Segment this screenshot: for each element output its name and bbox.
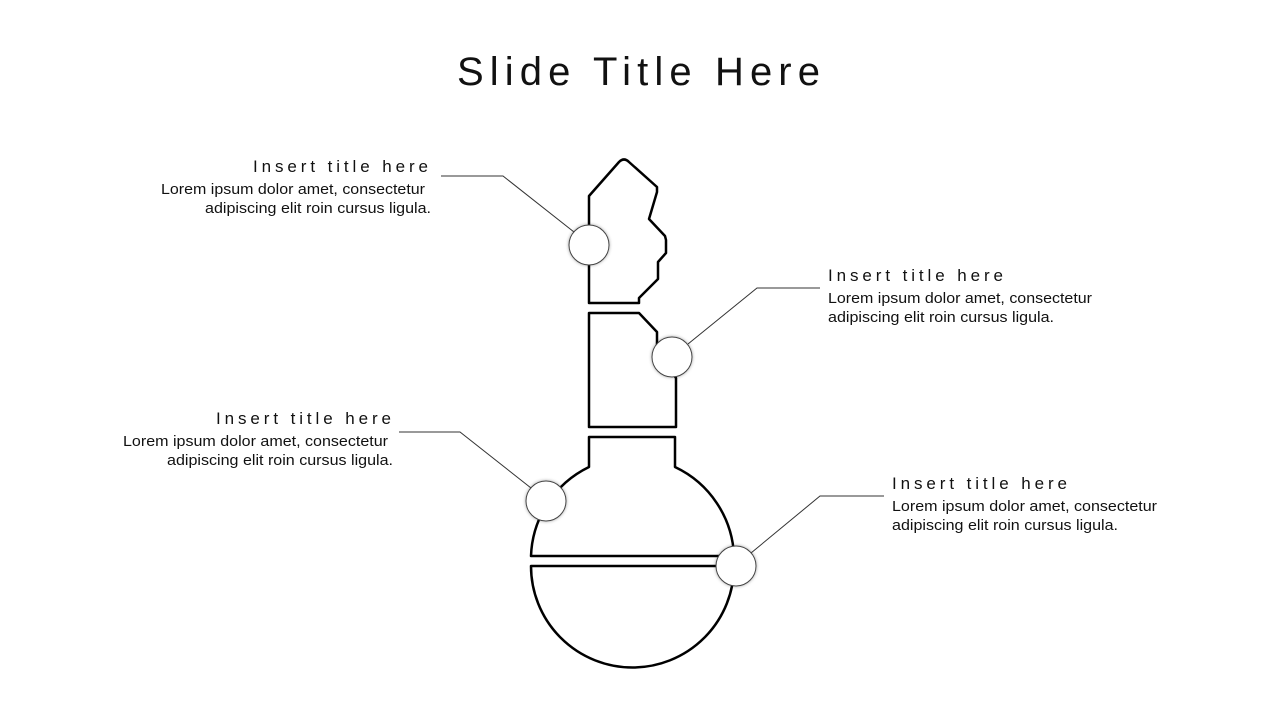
callout: right 1: Lorem ipsum dolor amet, consectetur — [828, 290, 1092, 307]
shape: middle piece — [589, 313, 676, 427]
callout: right 1: adipiscing elit roin cursus ligula. — [828, 309, 1054, 326]
shape: flask lower — [531, 566, 734, 668]
callout: left 2: adipiscing elit roin cursus ligula. — [167, 452, 393, 469]
callout: left 2: Insert title here — [216, 409, 391, 428]
callout: left 2: Lorem ipsum dolor amet, consectetur — [123, 433, 388, 450]
markers — [526, 225, 756, 586]
callout: right 1: Insert title here — [828, 266, 1003, 285]
connector lines — [399, 176, 884, 553]
callout: right 2 — [892, 474, 1157, 534]
callout: right 2: Insert title here — [892, 474, 1067, 493]
callout: right 2: Lorem ipsum dolor amet, consectetur — [892, 498, 1157, 515]
title: Slide Title Here — [457, 50, 820, 94]
shape: flask upper — [531, 437, 734, 556]
callout: right 1 — [828, 266, 1092, 326]
callout: right 2: adipiscing elit roin cursus ligula. — [892, 517, 1118, 534]
callout: top-left: adipiscing elit roin cursus ligula. — [205, 200, 431, 217]
shape: top piece — [589, 160, 666, 303]
callout: left 2 — [123, 409, 393, 469]
callout: top-left — [161, 157, 431, 217]
callout: top-left: Insert title here — [253, 157, 428, 176]
callout: top-left: Lorem ipsum dolor amet, consectetur — [161, 181, 425, 198]
